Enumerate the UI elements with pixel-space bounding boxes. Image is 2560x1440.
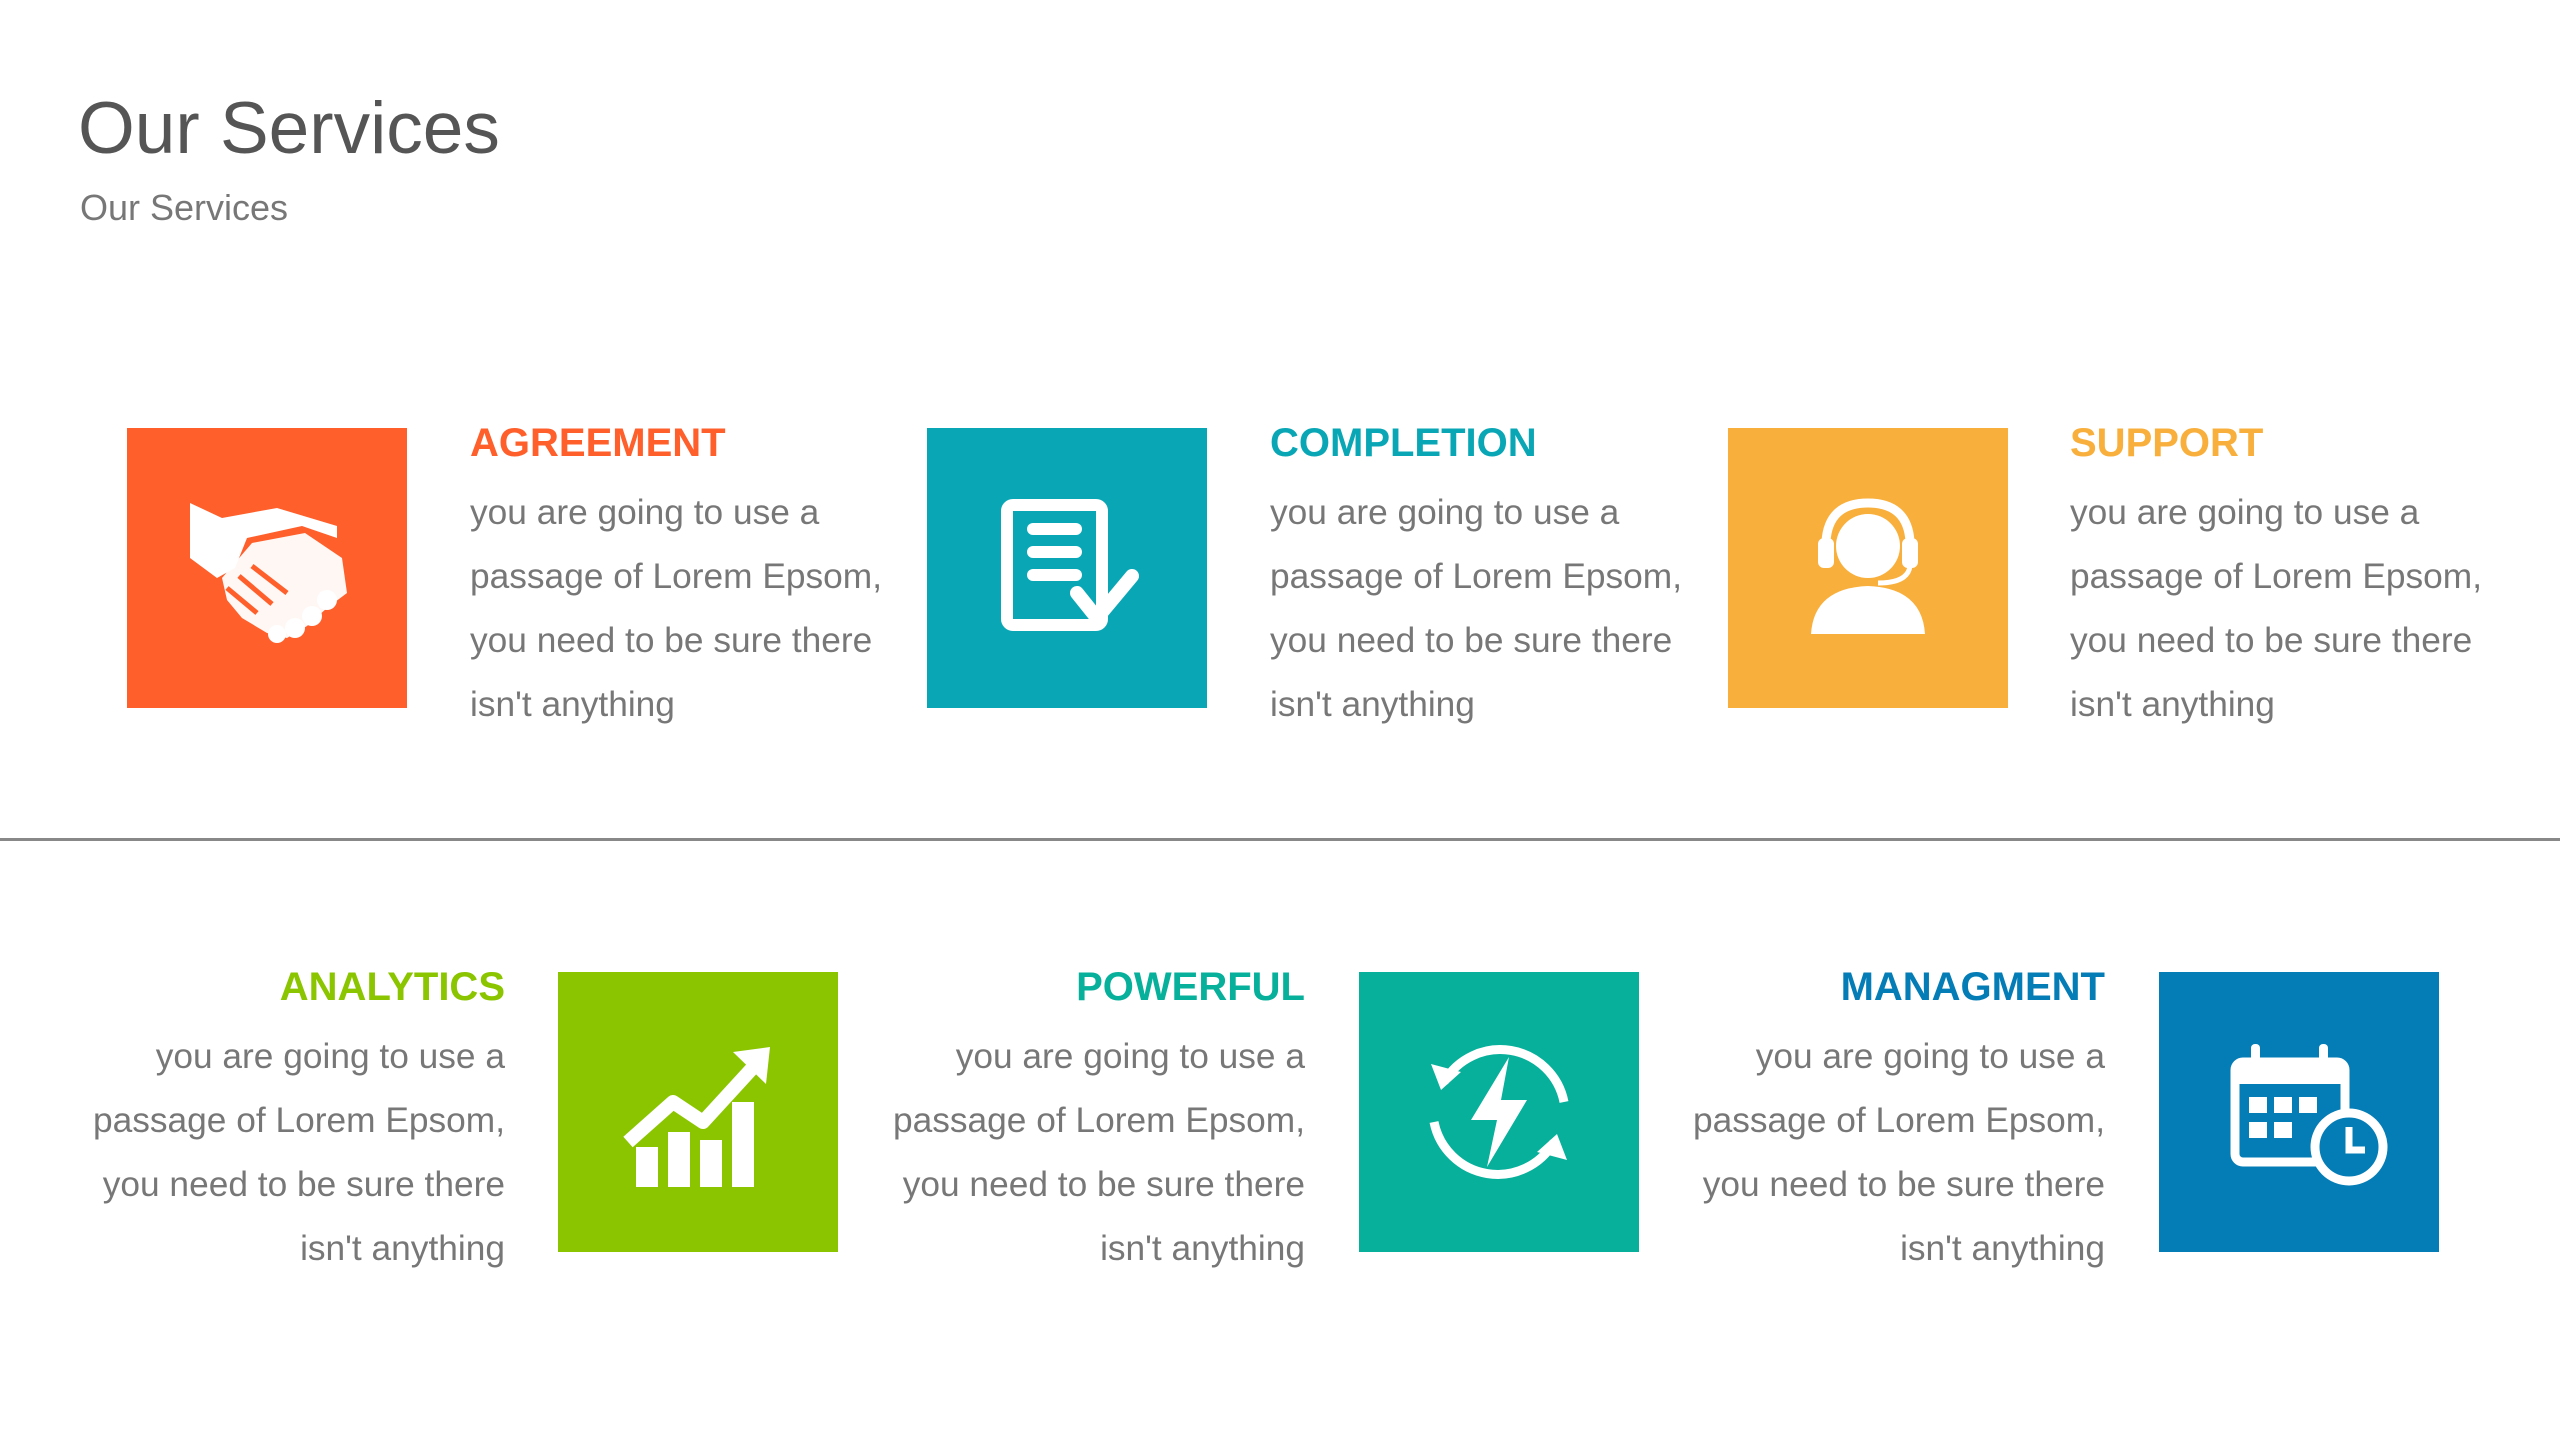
text: agreement: you are going to use a passage of Lorem Epsom, you need to be sure there isn't anything	[470, 493, 882, 724]
panel: completion icon	[927, 428, 1207, 708]
panel: powerful icon	[1359, 972, 1639, 1252]
text: managment: you are going to use a passage of Lorem Epsom, you need to be sure there isn't anything	[1693, 1037, 2105, 1268]
text: powerful: you are going to use a passage of Lorem Epsom, you need to be sure there isn't anything	[893, 1037, 1305, 1268]
panel: managment icon	[2159, 972, 2439, 1252]
text: agreement: AGREEMENT	[470, 421, 726, 465]
title: Our Services	[78, 88, 500, 169]
panel: analytics icon	[558, 972, 838, 1252]
text: support: you are going to use a passage of Lorem Epsom, you need to be sure there isn't anything	[2070, 493, 2482, 724]
text: completion: you are going to use a passage of Lorem Epsom, you need to be sure there isn't anything	[1270, 493, 1682, 724]
text: managment: MANAGMENT	[1841, 965, 2105, 1009]
panel: support icon	[1728, 428, 2008, 708]
text: analytics: you are going to use a passage of Lorem Epsom, you need to be sure there isn't anything	[93, 1037, 505, 1268]
text: support: SUPPORT	[2070, 421, 2263, 465]
panel: agreement icon	[127, 428, 407, 708]
text: powerful: POWERFUL	[1076, 965, 1305, 1009]
text: analytics: ANALYTICS	[280, 965, 505, 1009]
text: completion: COMPLETION	[1270, 421, 1537, 465]
divider	[0, 838, 2560, 841]
subtitle: Our Services	[80, 187, 288, 228]
